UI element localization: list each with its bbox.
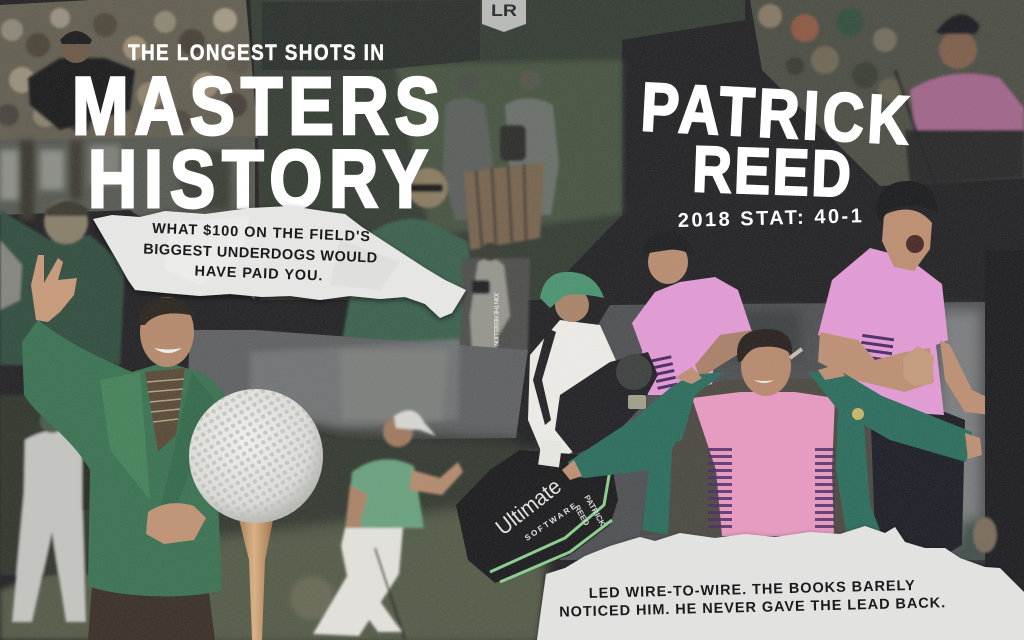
- panel: dark green course photo top middle: [250, 0, 745, 300]
- dark trousers: [855, 412, 965, 555]
- figure: golf bag: REED: [572, 504, 591, 527]
- pink polo: [692, 392, 835, 536]
- panel: photographer strip: [460, 243, 530, 400]
- subtitle line 3: HAVE PAID YOU.: [194, 264, 323, 284]
- head and hair: [741, 336, 791, 396]
- right forearm: [940, 340, 993, 415]
- figure: golfer in green shirt celebrating: [313, 410, 463, 640]
- panel: pale grey photo middle: [188, 330, 528, 440]
- name line 1: PATRICK: [639, 69, 911, 159]
- green jacket sleeves and panels: [568, 372, 725, 478]
- badge on jacket: [852, 408, 864, 420]
- panel: dark right edge strip: [973, 250, 1024, 580]
- panel: waving green jacket man background: [0, 200, 125, 365]
- panel: two walking men in the course photo: [443, 70, 559, 220]
- panel: grey tree photo behind Reed: [540, 302, 990, 560]
- green jacket: [22, 320, 233, 596]
- figure: caddie in white: [528, 272, 625, 468]
- pink shirt: [818, 248, 948, 415]
- raised hand: [31, 255, 77, 322]
- cigar: [790, 349, 802, 358]
- panel: hugging men in white: [0, 395, 100, 622]
- panel: wooden pallet: [464, 162, 544, 250]
- subtitle line 2: BIGGEST UNDERDOGS WOULD: [143, 242, 377, 266]
- heading: Patrick Reed name and stat: [639, 69, 911, 232]
- icon: golf ball: [189, 389, 323, 523]
- stat: 2018 STAT: 40-1: [678, 205, 862, 232]
- fist: [903, 346, 934, 386]
- panel: trees and sky photo left: [0, 136, 255, 300]
- head: [882, 210, 932, 271]
- title line 2: HISTORY: [88, 133, 428, 224]
- badge: LR logo: LR: [491, 1, 517, 20]
- figure: Charl Schwartzel in green jacket: [22, 255, 233, 640]
- head: [140, 297, 194, 367]
- figure: golf bag: SOFTWARE: [523, 501, 578, 543]
- trousers: [88, 585, 215, 640]
- callout: torn paper description: [537, 526, 1024, 640]
- figure: right man celebrating in pink: [818, 181, 1024, 555]
- figure: golf bag: Ultimate: [491, 473, 566, 540]
- callout: torn paper subtitle: [93, 206, 466, 318]
- subtitle line 1: WHAT $100 ON THE FIELD'S: [152, 221, 371, 245]
- icon: golf tee: [238, 515, 274, 640]
- striped shirt: [145, 368, 185, 452]
- badge: LR logo: [482, 0, 526, 32]
- jacket inside: [640, 378, 875, 535]
- figure: Patrick Reed in pink under green jacket: [562, 329, 982, 536]
- hands: [562, 460, 582, 480]
- name line 2: REED: [692, 132, 852, 211]
- figure: golf bag: PATRICK: [582, 494, 607, 528]
- description line 2: NOTICED HIM. HE NEVER GAVE THE LEAD BACK.: [559, 595, 945, 621]
- description line 1: LED WIRE-TO-WIRE. THE BOOKS BARELY: [589, 578, 915, 602]
- title line 1: MASTERS: [72, 60, 440, 151]
- panel: crowd photo top left: [0, 0, 258, 140]
- title kicker: THE LONGEST SHOTS IN: [128, 41, 384, 65]
- panel: green jacket man with sunglasses: [340, 168, 474, 420]
- figure: golf bag: [456, 352, 658, 583]
- title block: [72, 41, 440, 224]
- figure: man in pink shirt behind Reed: [632, 232, 752, 395]
- clasped hand: [146, 503, 206, 544]
- arm: [818, 332, 934, 392]
- panel: grass foreground bottom left: [0, 400, 550, 640]
- side caption: join the rebellion: JOIN THE REBELLION: [492, 292, 498, 346]
- panel: top right photo with pink shirt golfer: [750, 0, 1024, 186]
